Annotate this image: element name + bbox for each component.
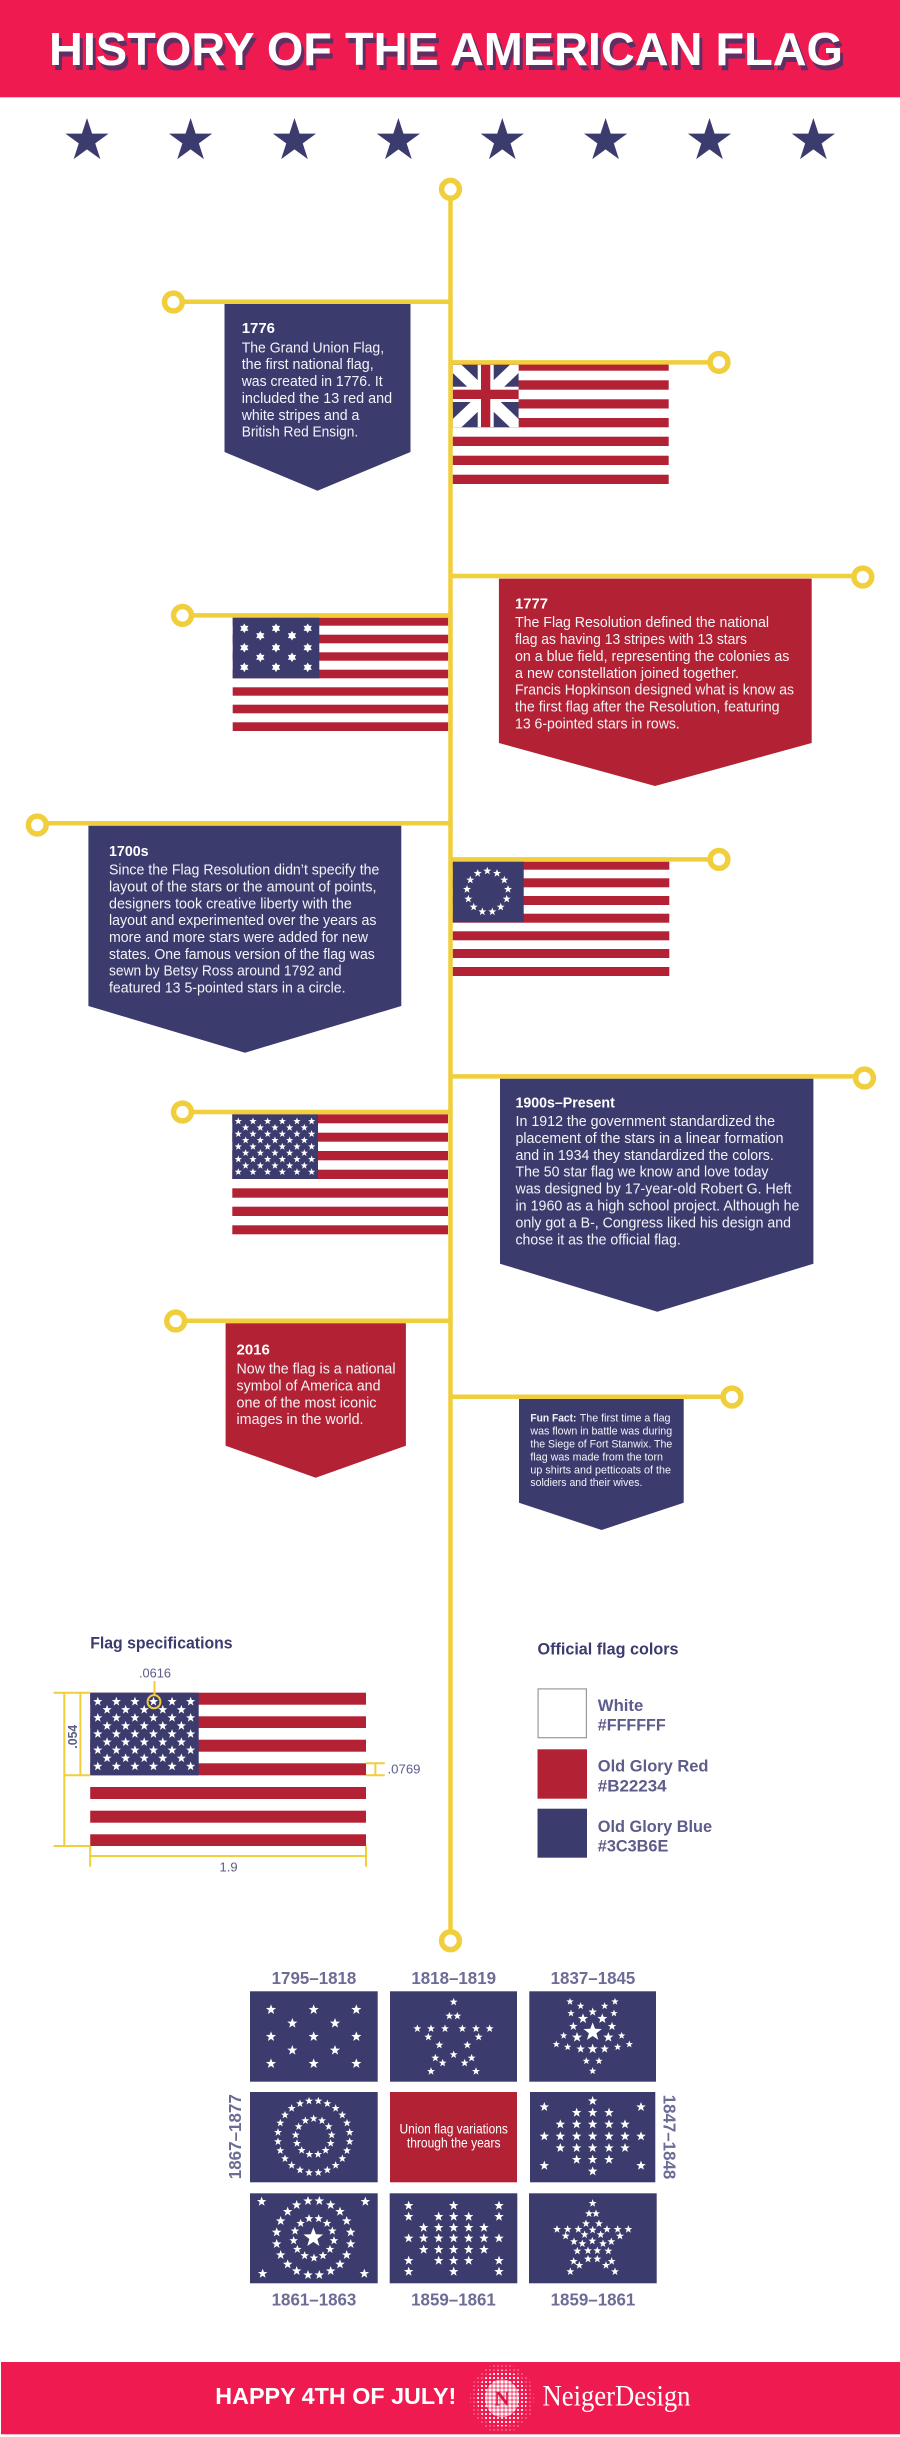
body text	[241, 340, 392, 441]
flag card: 1861-1863	[250, 2193, 378, 2283]
dimension: flag width: 1.9	[220, 1860, 238, 1875]
canton: 13 six-pointed stars	[233, 618, 319, 678]
swatch: white: White	[598, 1696, 643, 1715]
variation label: 1818–1819	[411, 1968, 496, 1988]
body text: more and more stars were added for new	[109, 930, 369, 946]
swatch: blue	[538, 1809, 712, 1858]
body text	[515, 1114, 800, 1249]
panel: 1900s to present	[500, 1079, 813, 1312]
body text: flag as having 13 stripes with 13 stars	[515, 632, 747, 648]
center card: caption: through the years	[407, 2135, 501, 2150]
swatch: blue: Old Glory Blue	[598, 1817, 712, 1836]
flag: modern 50-star	[232, 1114, 448, 1234]
swatch: white: #FFFFFF	[598, 1716, 666, 1735]
fun fact text: flag was made from the torn	[530, 1452, 663, 1464]
connector: 1777 flag	[174, 606, 450, 624]
flag card: 1818-1819	[390, 1991, 517, 2082]
dimension: canton height: .054	[65, 1724, 80, 1749]
body text: Since the Flag Resolution didn’t specify the	[109, 863, 379, 879]
connector: Betsy Ross flag	[451, 850, 728, 868]
body text: 13 6-pointed stars in rows.	[515, 716, 680, 732]
connector: 1776	[164, 293, 450, 311]
fun fact label: Fun Fact:	[530, 1413, 576, 1425]
flag: Betsy Ross circle of stars	[453, 862, 669, 976]
variation label: 1859–1861	[551, 2290, 636, 2310]
body text: symbol of America and	[236, 1378, 380, 1394]
heading: Official flag colors	[538, 1640, 678, 1658]
body text: designers took creative liberty with the	[109, 896, 352, 912]
year heading: 2016	[236, 1342, 270, 1359]
fun fact text: the Siege of Fort Stanwix. The	[530, 1439, 672, 1451]
flag card: 1859-1861 grid	[390, 2193, 517, 2283]
logo wordmark: NeigerDesign	[542, 2380, 690, 2413]
panel: 1776	[224, 304, 410, 491]
panel: 2016	[226, 1323, 406, 1478]
body text: The Flag Resolution defined the national	[515, 615, 769, 631]
timeline bottom node	[442, 1932, 459, 1950]
swatch: white	[538, 1689, 666, 1738]
body text: one of the most iconic	[236, 1395, 376, 1411]
footer banner	[1, 2362, 900, 2434]
flag card: 1867-1877	[250, 2092, 378, 2182]
year heading: 1700s	[109, 843, 149, 860]
header banner	[0, 0, 900, 97]
canton: 50 stars	[232, 1114, 318, 1179]
swatch: red: #B22234	[598, 1776, 667, 1795]
center card: caption: Union flag variations	[400, 2121, 508, 2136]
body text: The 50 star flag we know and love today	[516, 1165, 769, 1181]
variation label: 1847–1848	[659, 2095, 679, 2179]
body text: white stripes and a	[241, 408, 360, 424]
panel: 1700s	[88, 826, 401, 1053]
connector: fun fact	[451, 1388, 741, 1406]
connector: 1700s	[28, 816, 450, 834]
body text: only got a B-, Congress liked his design and	[516, 1216, 791, 1232]
connector: 50-star flag	[174, 1103, 450, 1121]
variation label: 1867–1877	[225, 2094, 245, 2179]
flag card: 1837-1845	[529, 1991, 656, 2082]
panel: fun fact	[519, 1399, 684, 1530]
flag: 1777 six-pointed stars in rows	[233, 618, 448, 731]
connector: 2016	[167, 1312, 450, 1330]
heading: Flag specifications	[90, 1634, 233, 1652]
logo: halftone N	[470, 2364, 534, 2433]
year heading: 1777	[515, 596, 548, 613]
body text	[109, 863, 379, 996]
swatch: red: Old Glory Red	[598, 1757, 708, 1776]
flag card: 1859-1861 star	[529, 2193, 657, 2283]
body text: In 1912 the government standardized the	[516, 1114, 775, 1130]
swatch: red	[538, 1749, 708, 1799]
body text	[236, 1361, 396, 1428]
timeline spine	[448, 196, 453, 1932]
stripe bracket	[366, 1763, 385, 1775]
canton: British union	[453, 365, 519, 427]
body text: and in 1934 they standardized the colors.	[516, 1148, 774, 1164]
swatch: blue: #3C3B6E	[598, 1837, 668, 1856]
center card: caption	[390, 2092, 517, 2182]
variation label: 1795–1818	[272, 1968, 357, 1988]
body text: the first national flag,	[242, 357, 374, 373]
body text: featured 13 5-pointed stars in a circle.	[109, 980, 346, 996]
star callout	[148, 1681, 160, 1708]
panel: union flag variations	[225, 1968, 679, 2310]
body text: layout of the stars or the amount of points,	[109, 879, 376, 895]
row of stars	[65, 118, 835, 159]
year heading: 1900s–Present	[516, 1094, 615, 1111]
body text: a new constellation joined together.	[515, 666, 739, 682]
width bracket	[90, 1846, 366, 1867]
body text: was designed by 17-year-old Robert G. Heft	[515, 1182, 792, 1198]
body text: placement of the stars in a linear formation	[516, 1131, 784, 1147]
spec flag	[90, 1693, 366, 1846]
body text: Now the flag is a national	[236, 1361, 396, 1377]
body text: included the 13 red and	[242, 391, 392, 407]
body text: The Grand Union Flag,	[242, 340, 384, 356]
body text: was created in 1776. It	[241, 374, 383, 390]
variation label: 1837–1845	[551, 1968, 636, 1988]
panel: 1777	[499, 579, 812, 786]
title shadow: HISTORY OF THE AMERICAN FLAG	[52, 28, 846, 80]
panel: official flag colors	[538, 1640, 712, 1858]
body text: chose it as the official flag.	[516, 1233, 681, 1249]
fun fact text: was flown in battle was during	[529, 1426, 672, 1438]
fun fact text	[529, 1413, 672, 1489]
footer message: HAPPY 4TH OF JULY!	[215, 2383, 456, 2409]
variation label: 1861–1863	[272, 2290, 357, 2310]
body text: states. One famous version of the flag was	[109, 947, 375, 963]
body text: sewn by Betsy Ross around 1792 and	[109, 964, 342, 980]
body text: the first flag after the Resolution, featuring	[515, 700, 780, 716]
canton: circle of 13 stars	[453, 862, 524, 922]
fun fact text: The first time a flag	[580, 1413, 670, 1425]
logo: halftone N: N	[494, 2386, 510, 2410]
dimension: star diameter: .0616	[139, 1665, 171, 1680]
connector: 1900s	[451, 1069, 873, 1087]
panel: flag specifications	[54, 1634, 420, 1875]
flag card: 1795-1818	[250, 1991, 378, 2082]
body text: Francis Hopkinson designed what is know as	[515, 683, 794, 699]
body text: on a blue field, representing the colonies as	[515, 649, 789, 665]
title: HISTORY OF THE AMERICAN FLAG	[49, 23, 843, 75]
variation label: 1859–1861	[411, 2290, 496, 2310]
body text: in 1960 as a high school project. Although he	[516, 1199, 800, 1215]
fun fact text: soldiers and their wives.	[530, 1477, 642, 1489]
flag card: 1847-1848	[530, 2092, 655, 2182]
fun fact text: up shirts and petticoats of the	[530, 1464, 671, 1476]
connector: Grand Union flag	[451, 354, 728, 371]
body text: British Red Ensign.	[242, 425, 358, 441]
dimension: stripe height: .0769	[388, 1761, 420, 1776]
connector: 1777	[451, 568, 872, 586]
body text: images in the world.	[236, 1412, 364, 1428]
timeline top node	[442, 180, 459, 198]
body text	[515, 615, 794, 732]
flag: Grand Union 1776	[453, 362, 669, 484]
year heading: 1776	[242, 320, 275, 337]
body text: layout and experimented over the years as	[109, 913, 376, 929]
height brackets	[54, 1693, 90, 1846]
